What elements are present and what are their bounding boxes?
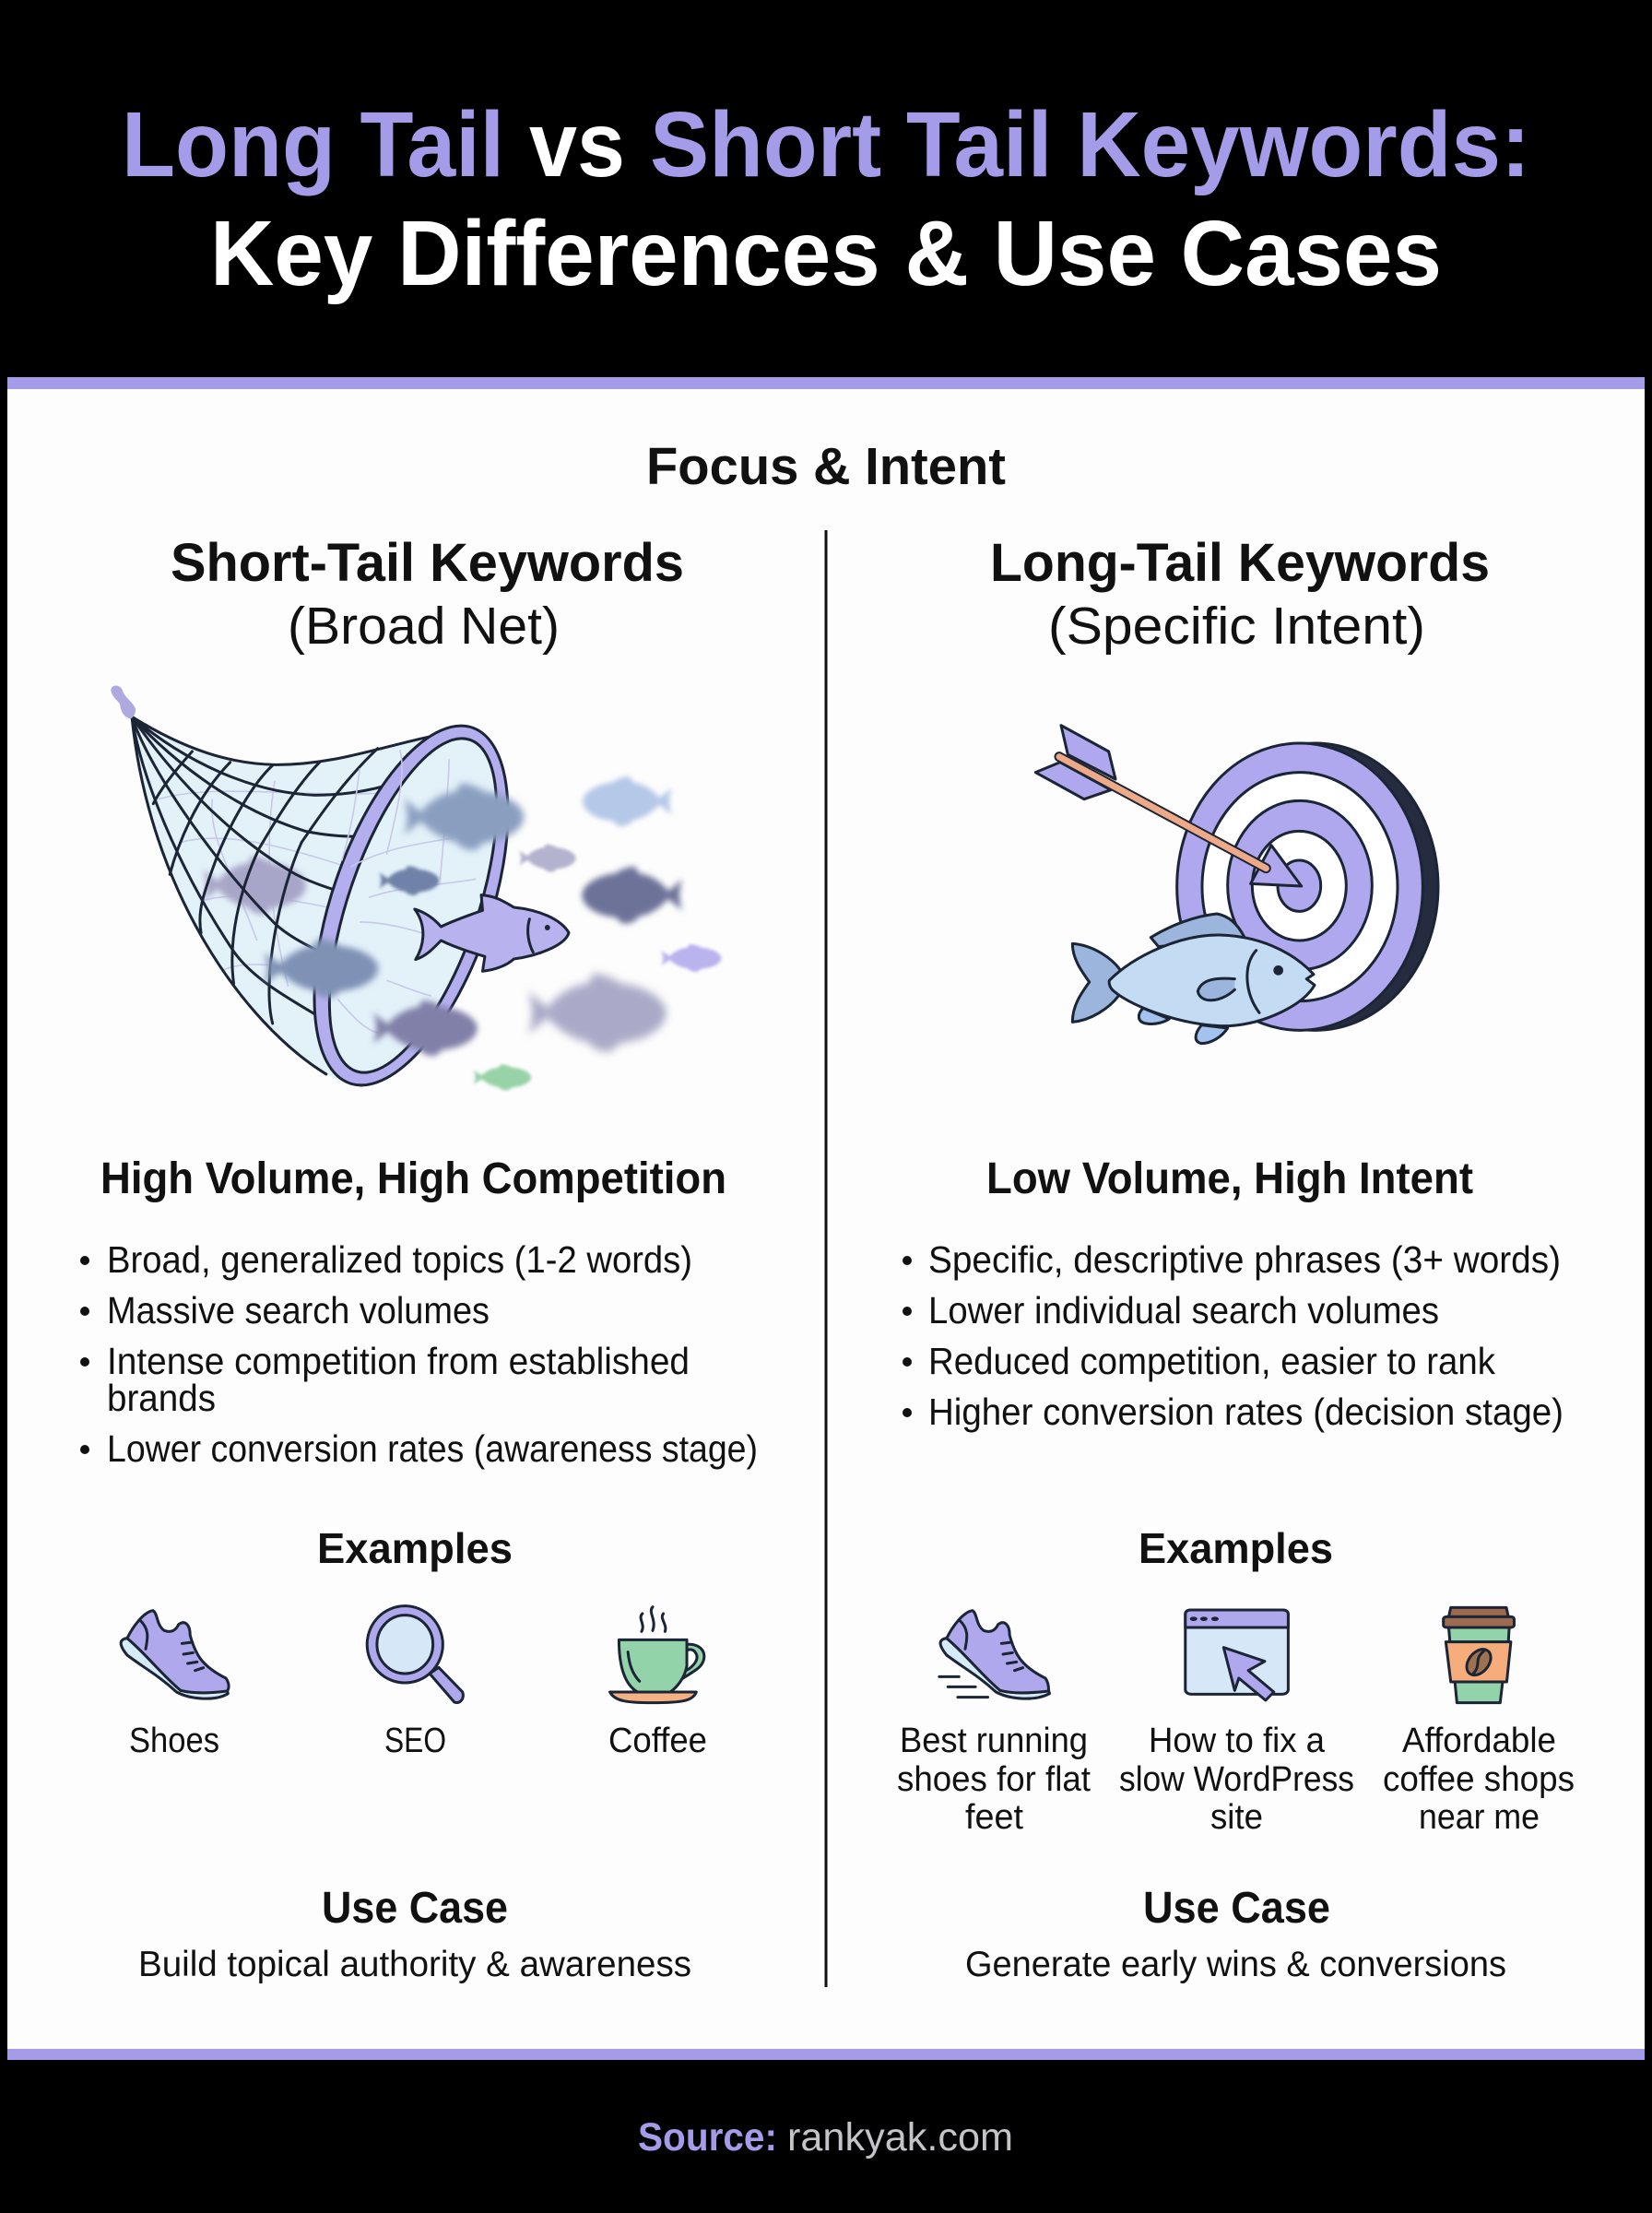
heading: short-tail keywords: (Broad Net) (288, 597, 560, 656)
icon: takeaway coffee (1444, 1607, 1514, 1703)
title (122, 93, 1530, 305)
source footer: Source: (638, 2115, 777, 2160)
icon: browser with cursor (1186, 1610, 1288, 1700)
example labels: long-tail: coffee shops (1383, 1760, 1575, 1799)
heading: examples short-tail: Examples (317, 1524, 513, 1572)
heading: short-tail keywords: Short-Tail Keywords (171, 533, 684, 593)
example labels: short-tail: SEO (384, 1722, 446, 1760)
bullet list: short-tail: Massive search volumes (107, 1289, 490, 1331)
blurred and highlighted fish (264, 750, 721, 1090)
example labels: long-tail (897, 1722, 1575, 1837)
subheading: long-tail: Low Volume, High Intent (986, 1154, 1473, 1203)
panel: comparison (7, 377, 1645, 2060)
title: Key Differences & Use Cases (210, 202, 1442, 305)
example labels: long-tail: site (1210, 1798, 1263, 1837)
use case: short-tail (138, 1884, 691, 1984)
title: Short Tail Keywords: (650, 93, 1530, 196)
bullet list: long-tail (903, 1238, 1564, 1433)
example labels: long-tail: near me (1419, 1798, 1540, 1837)
net handle (111, 686, 136, 718)
net ring (275, 702, 548, 1109)
heading: long-tail keywords: Long-Tail Keywords (990, 533, 1490, 593)
example labels: long-tail: slow WordPress (1119, 1760, 1354, 1799)
source footer: rankyak.com (787, 2115, 1013, 2160)
icon: magnifying glass (367, 1606, 463, 1702)
use case: long-tail (965, 1884, 1506, 1984)
icon: running shoe (939, 1611, 1049, 1698)
main fish (415, 895, 569, 971)
bullet list: short-tail (80, 1238, 758, 1470)
bullet list: long-tail: Reduced competition, easier to rank (928, 1340, 1495, 1382)
example labels: long-tail: Best running (900, 1722, 1088, 1760)
bullet list: long-tail: Lower individual search volumes (928, 1289, 1439, 1331)
icon: coffee cup (610, 1607, 704, 1703)
title: Long Tail (122, 93, 504, 196)
use case: short-tail: Use Case (322, 1884, 508, 1933)
example labels: long-tail: How to fix a (1149, 1722, 1326, 1760)
example labels: short-tail: Shoes (129, 1722, 219, 1760)
heading: long-tail keywords: (Specific Intent) (1048, 597, 1425, 656)
example labels: short-tail (129, 1722, 707, 1760)
use case: long-tail: Use Case (1143, 1884, 1330, 1933)
bullet list: long-tail: Higher conversion rates (decision stage) (928, 1391, 1564, 1433)
bullet list: short-tail: Intense competition from established (107, 1340, 690, 1382)
use case: long-tail: Generate early wins & conversions (965, 1945, 1506, 1984)
target (1177, 743, 1438, 1030)
example labels: long-tail: Affordable (1402, 1722, 1556, 1760)
heading: examples long-tail: Examples (1139, 1524, 1333, 1572)
heading: short-tail keywords (171, 533, 684, 656)
target fish (1072, 914, 1315, 1044)
bullet list: short-tail: Broad, generalized topics (1-2 words) (107, 1238, 692, 1281)
bullet list: short-tail: brands (107, 1377, 216, 1419)
subheading: short-tail: High Volume, High Competition (100, 1154, 726, 1203)
bullet list: long-tail: Specific, descriptive phrases (3+ words) (928, 1238, 1561, 1281)
example labels: long-tail: feet (965, 1798, 1023, 1837)
illustration: arrow in target with fish (1035, 726, 1438, 1044)
icon: shoe (121, 1611, 229, 1698)
heading: focus and intent: Focus & Intent (646, 437, 1006, 496)
example labels: long-tail: shoes for flat (897, 1760, 1091, 1799)
arrow (1035, 726, 1302, 886)
source footer (638, 2115, 1013, 2160)
use case: short-tail: Build topical authority & awareness (138, 1945, 691, 1984)
example labels: short-tail: Coffee (608, 1722, 707, 1760)
bullet list: short-tail: Lower conversion rates (awareness stage) (107, 1427, 758, 1470)
net body (111, 686, 458, 1085)
heading: long-tail keywords (990, 533, 1490, 656)
illustration: net catching many fish (111, 686, 721, 1109)
title: vs (529, 93, 625, 196)
